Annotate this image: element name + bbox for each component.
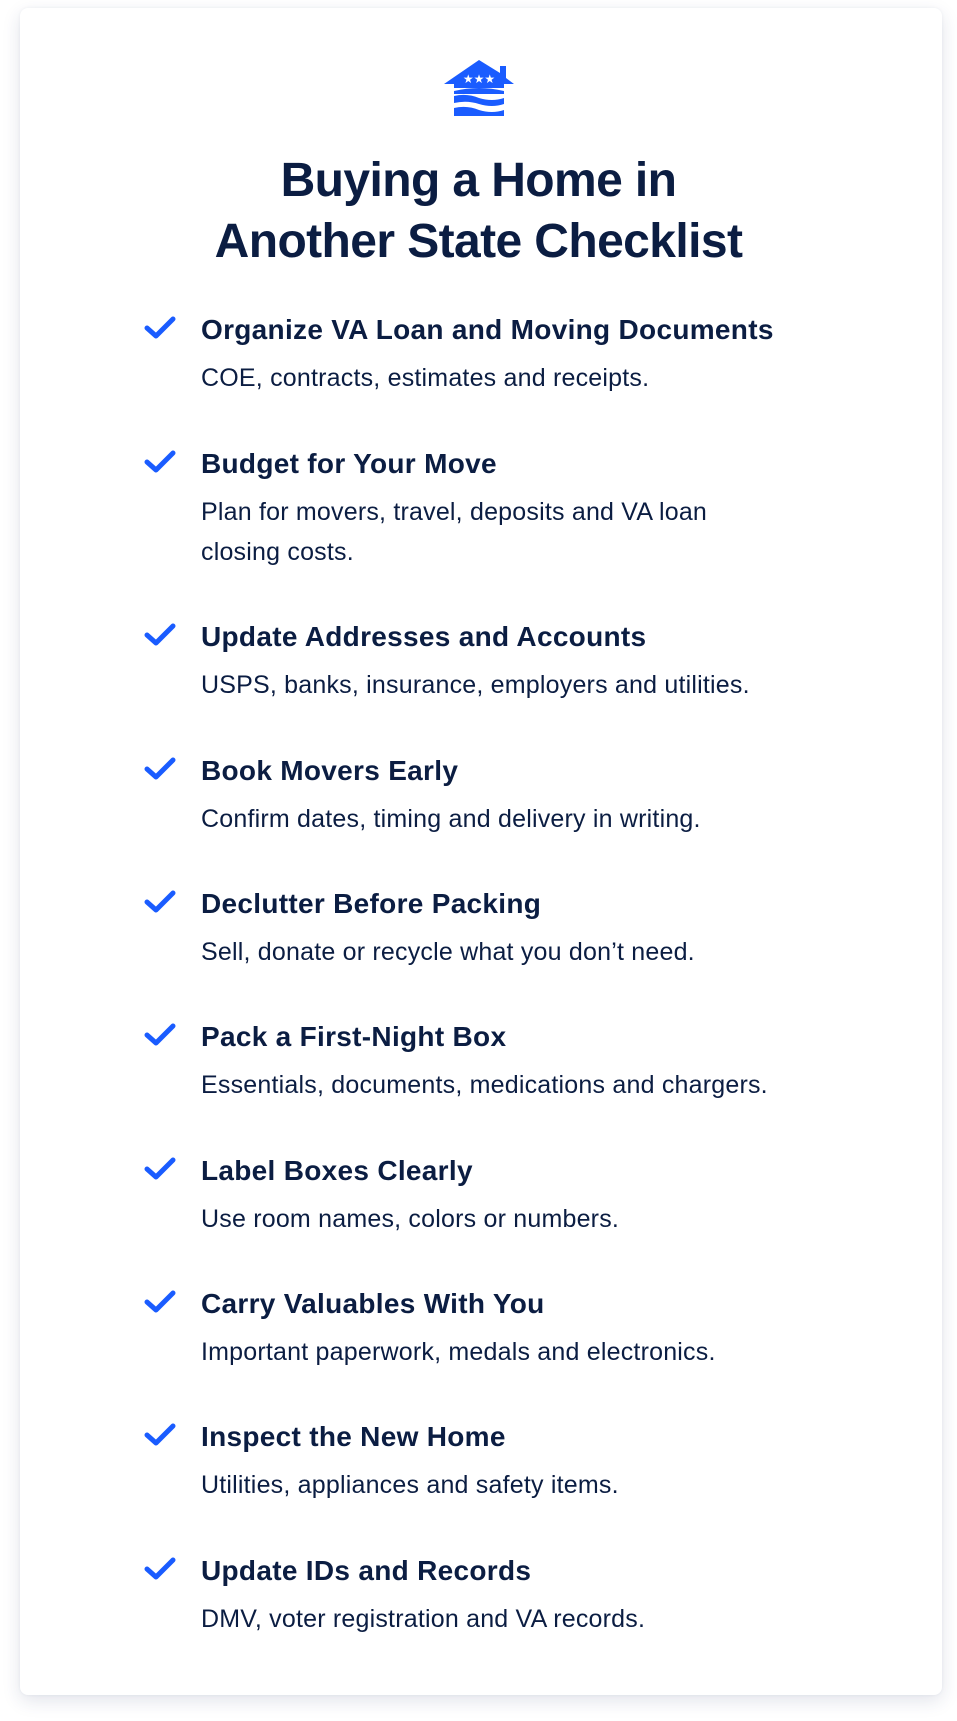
- text: USPS, banks, insurance, employers and utilities.: [201, 671, 750, 699]
- title: Buying a Home in: [281, 154, 676, 207]
- item 5: [144, 888, 695, 966]
- icon: house logo: ★★★: [463, 72, 495, 86]
- text: DMV, voter registration and VA records.: [201, 1605, 645, 1633]
- text: Confirm dates, timing and delivery in writing.: [201, 805, 701, 833]
- text: Label Boxes Clearly: [201, 1155, 473, 1186]
- text: Important paperwork, medals and electronics.: [201, 1338, 716, 1366]
- text: Declutter Before Packing: [201, 888, 541, 919]
- text: Inspect the New Home: [201, 1421, 506, 1452]
- text: Budget for Your Move: [201, 448, 497, 479]
- item 10: [144, 1555, 645, 1633]
- checklist: [144, 314, 774, 1633]
- title: [215, 154, 742, 268]
- text: Organize VA Loan and Moving Documents: [201, 314, 774, 345]
- item 3: [144, 621, 750, 699]
- item 2: [144, 448, 707, 566]
- text: Book Movers Early: [201, 755, 458, 786]
- title: Another State Checklist: [215, 215, 742, 268]
- item 1: [144, 314, 774, 392]
- icon: house logo: [444, 60, 514, 116]
- item 6: [144, 1021, 768, 1099]
- text: Sell, donate or recycle what you don’t need.: [201, 938, 695, 966]
- text: Update Addresses and Accounts: [201, 621, 646, 652]
- text: Utilities, appliances and safety items.: [201, 1471, 619, 1499]
- text: Pack a First-Night Box: [201, 1021, 506, 1052]
- text: Update IDs and Records: [201, 1555, 531, 1586]
- item 7: [144, 1155, 619, 1233]
- text: Use room names, colors or numbers.: [201, 1205, 619, 1233]
- item 4: [144, 755, 701, 833]
- text: Essentials, documents, medications and chargers.: [201, 1071, 768, 1099]
- item 8: [144, 1288, 716, 1366]
- item 9: [144, 1421, 619, 1499]
- text: Plan for movers, travel, deposits and VA loan closing costs.: [201, 498, 707, 566]
- text: COE, contracts, estimates and receipts.: [201, 364, 649, 392]
- text: Carry Valuables With You: [201, 1288, 545, 1319]
